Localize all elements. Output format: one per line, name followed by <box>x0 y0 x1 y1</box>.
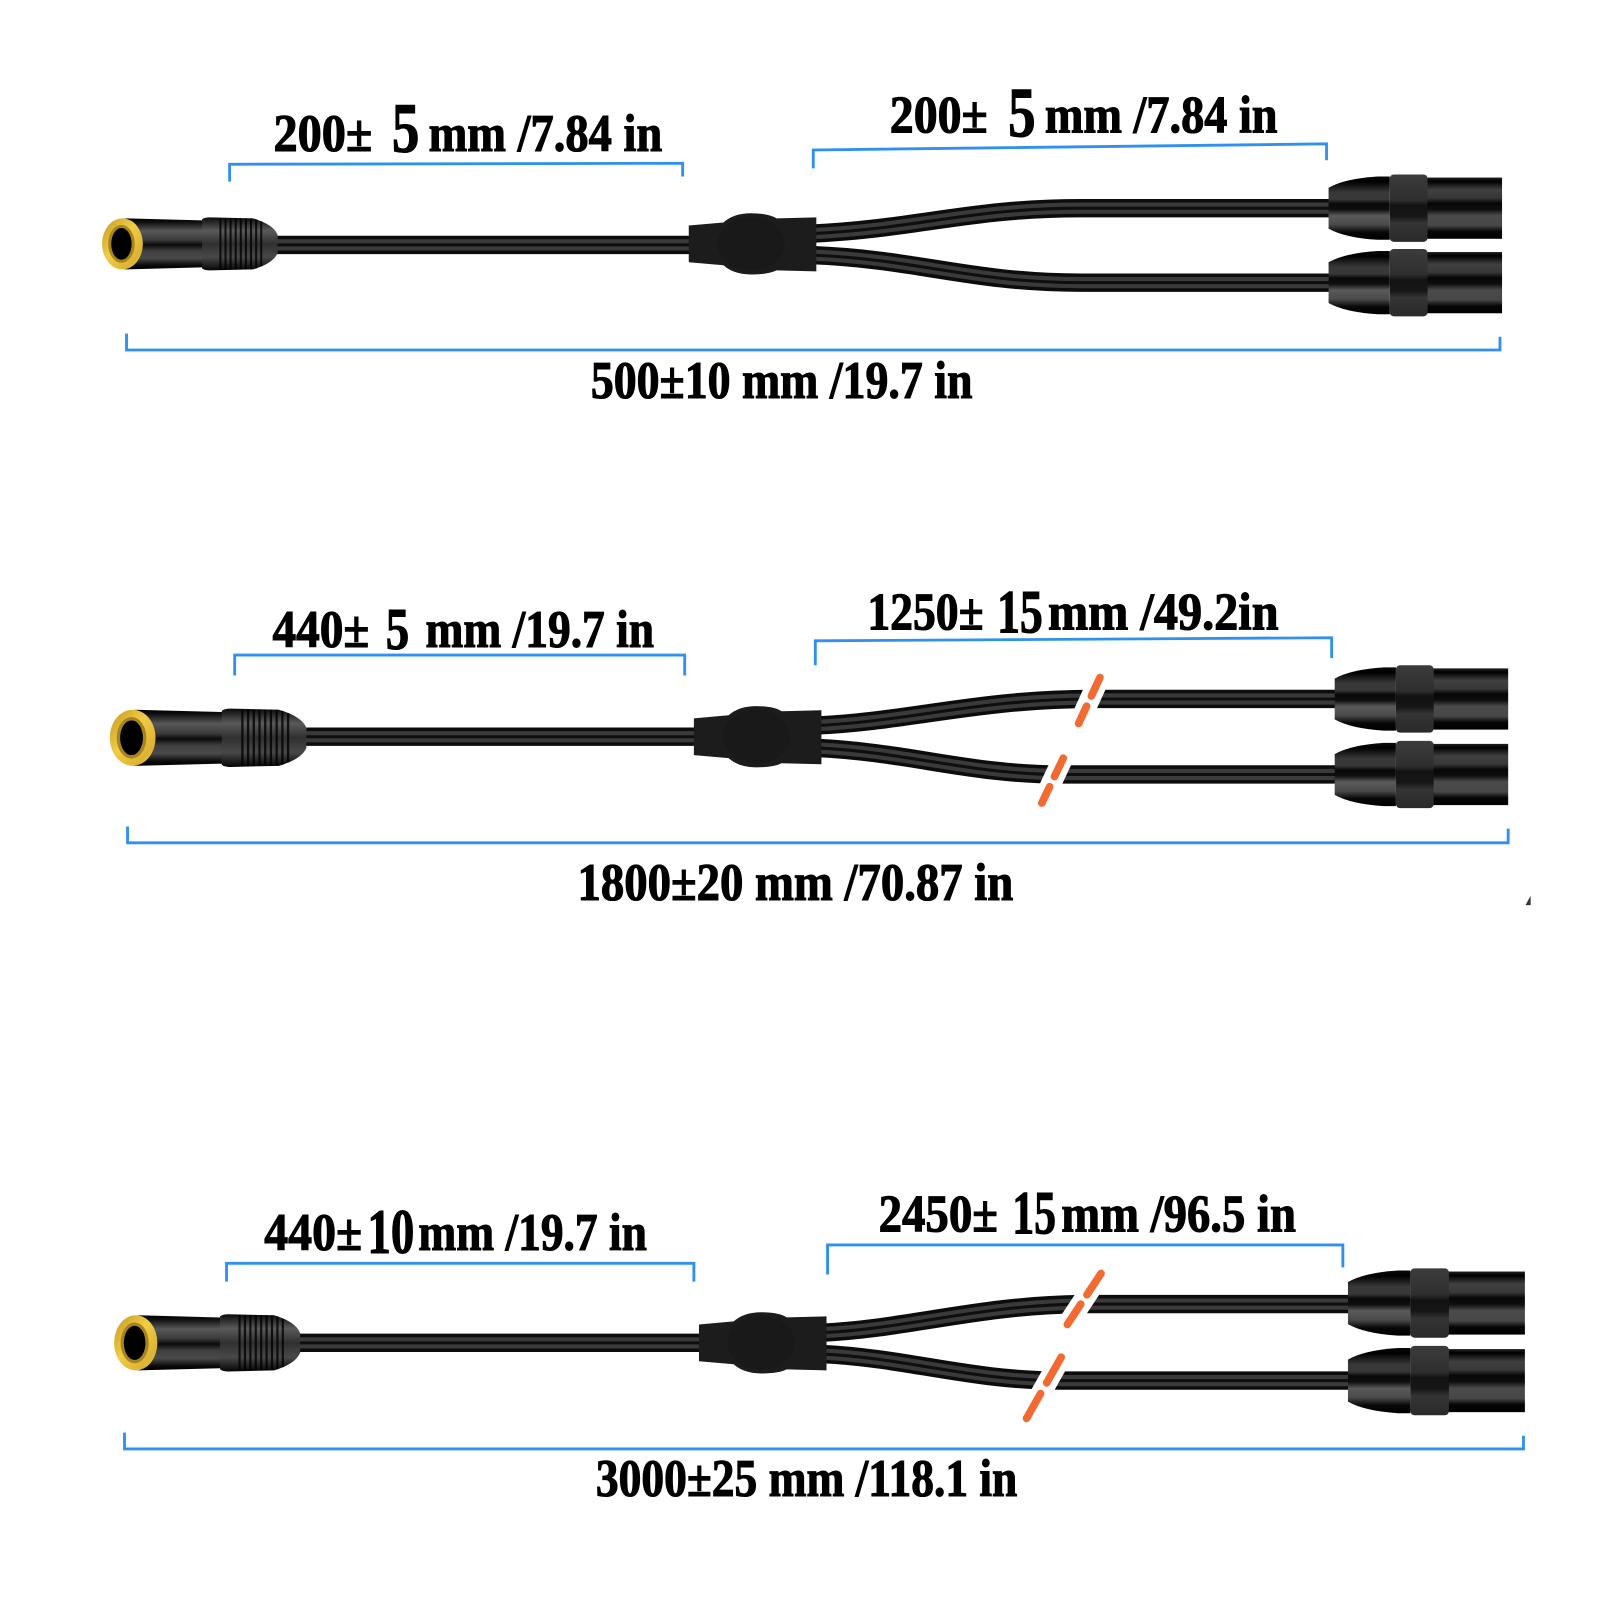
dimension label: right branch 2450 mm <box>879 1180 1296 1248</box>
dimension label: right branch 1250 mm: 1250± <box>867 584 984 642</box>
dimension label: left tail 440 mm: 5 <box>386 596 409 662</box>
dimension label: right branch 2450 mm: 2450± <box>879 1186 998 1244</box>
dimension label: total 1800 mm: 1800±20 mm /70.87 in <box>578 854 1013 912</box>
icon: bottom connector <box>1329 249 1502 316</box>
dimension label: right branch 200 mm: 5 <box>1008 74 1036 153</box>
cable: Y-splitter assembly <box>291 1304 1352 1381</box>
break mark: upper cable <box>1063 1267 1105 1331</box>
bracket: total length <box>124 1433 1523 1449</box>
break mark: upper cable <box>1076 670 1103 731</box>
dimension label: left tail 440 mm: 440± <box>264 1204 362 1262</box>
break mark: lower cable <box>1039 751 1066 810</box>
dimension label: right branch 1250 mm: 15 <box>997 579 1043 647</box>
panel: 1800 mm cable <box>110 579 1531 912</box>
bracket: left tail <box>227 1263 694 1282</box>
bracket: left tail <box>235 655 685 676</box>
icon: top connector <box>1348 1268 1525 1338</box>
dimension label: right branch 2450 mm: 15 <box>1012 1180 1056 1248</box>
icon: gold 3.5mm female jack <box>110 709 306 767</box>
dimension label: left tail 200 mm: 5 <box>392 89 419 168</box>
icon: bottom connector <box>1335 741 1508 808</box>
dimension label: left tail 200 mm: mm /7.84 in <box>429 105 662 163</box>
dimension label: right branch 200 mm: mm /7.84 in <box>1045 87 1278 145</box>
dimension label: left tail 440 mm: 10 <box>367 1197 414 1267</box>
bracket: right branch <box>828 1245 1343 1274</box>
dimension label: left tail 440 mm: mm /19.7 in <box>418 1204 647 1262</box>
dimension label: right branch 2450 mm: mm /96.5 in <box>1061 1186 1296 1244</box>
cable: Y-splitter assembly <box>296 699 1339 774</box>
dimension label: right branch 1250 mm <box>867 579 1279 647</box>
dimension label: left tail 200 mm <box>273 89 662 168</box>
dimension label: total 3000 mm: 3000±25 mm /118.1 in <box>596 1450 1017 1508</box>
break mark: lower cable <box>1023 1350 1065 1424</box>
dimension label: right branch 1250 mm: mm /49.2in <box>1048 584 1279 642</box>
icon: top connector <box>1329 174 1502 242</box>
icon: bottom connector <box>1348 1346 1525 1415</box>
icon: gold 3.5mm female jack <box>114 1314 300 1372</box>
bracket: total length <box>127 334 1500 350</box>
dimension label: left tail 440 mm: mm /19.7 in <box>426 601 654 659</box>
dimension label: left tail 200 mm: 200± <box>273 105 372 163</box>
icon: gold 3.5mm female jack <box>102 217 278 270</box>
dimension label: right branch 200 mm <box>890 74 1278 153</box>
dimension label: left tail 440 mm <box>264 1197 647 1267</box>
dimension label: left tail 440 mm <box>272 596 654 662</box>
bracket: left tail <box>230 163 683 182</box>
dimension label: right branch 200 mm: 200± <box>890 87 988 145</box>
bracket: total length <box>128 827 1508 843</box>
bracket: right branch <box>813 144 1327 168</box>
icon: top connector <box>1335 665 1508 733</box>
cable: Y-splitter assembly <box>270 208 1332 283</box>
panel: 3000 mm cable <box>114 1180 1525 1508</box>
dimension label: left tail 440 mm: 440± <box>272 601 369 659</box>
dimension label: total 500 mm: 500±10 mm /19.7 in <box>591 352 972 410</box>
panel: 500 mm cable <box>102 74 1502 410</box>
stray mark <box>1526 896 1531 905</box>
bracket: right branch <box>815 638 1332 665</box>
